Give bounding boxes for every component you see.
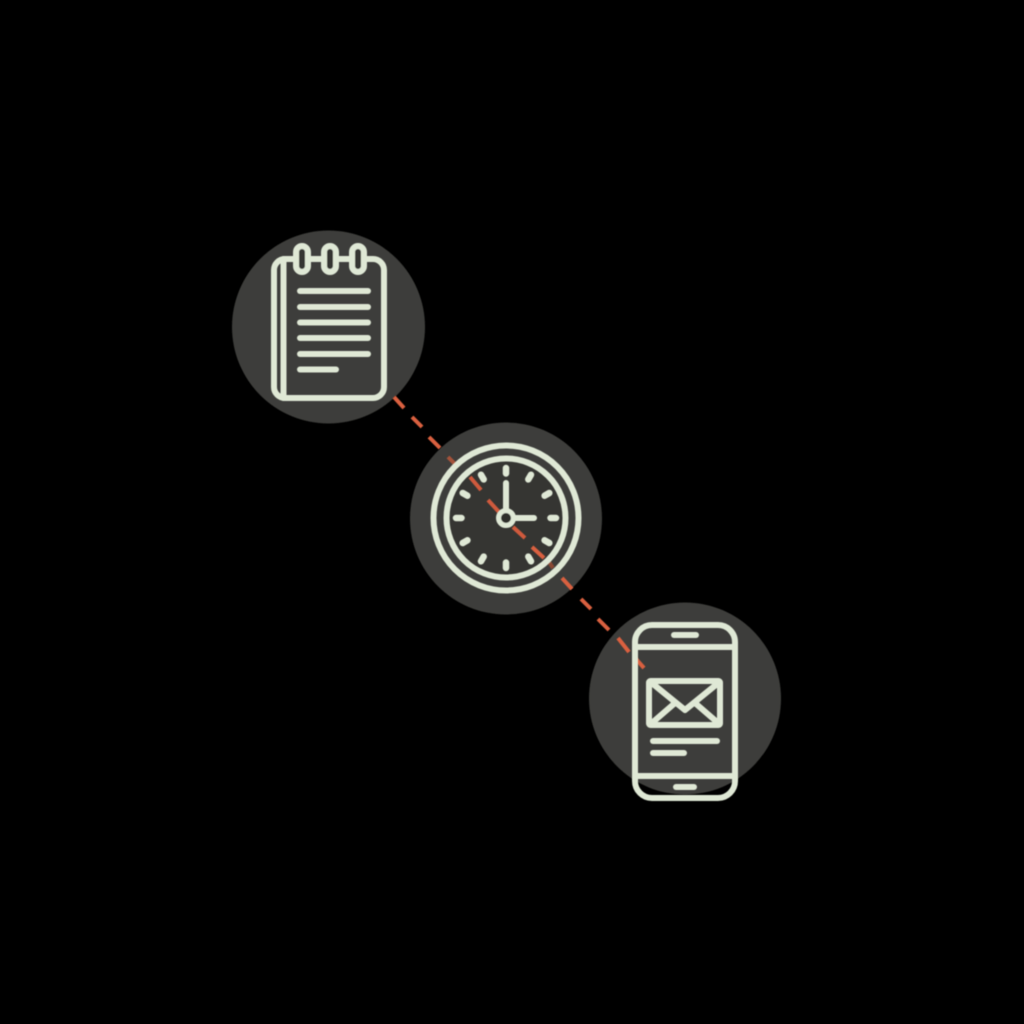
phone body [635, 625, 735, 798]
notebook text lines [300, 291, 368, 370]
icon: notebook [274, 246, 384, 398]
phone screen dividers [635, 647, 735, 776]
notebook spine [280, 259, 286, 398]
clock hour ticks [456, 468, 556, 568]
icon: phone with message [635, 625, 735, 798]
phone home button [676, 784, 694, 790]
background circles [232, 230, 781, 794]
clock inner ring [446, 458, 566, 578]
message text lines [653, 741, 717, 753]
dashed connector arrow path [394, 397, 644, 668]
envelope icon [649, 681, 720, 725]
clock hands [506, 483, 534, 518]
icon: clock [434, 446, 578, 590]
clock hub [498, 510, 514, 526]
clock outer ring [434, 446, 578, 590]
phone speaker [674, 632, 696, 638]
notebook cover [274, 259, 384, 398]
notebook rings [296, 246, 364, 272]
